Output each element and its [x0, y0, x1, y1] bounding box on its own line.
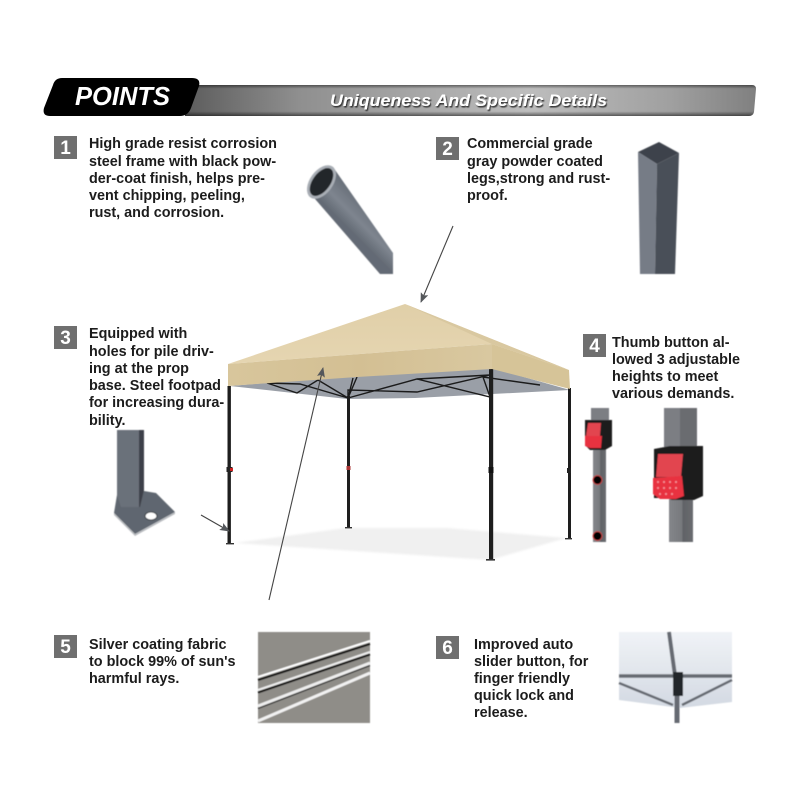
number badge 4: 4	[589, 336, 600, 357]
number badge 5	[54, 635, 77, 658]
number badge 1	[54, 136, 77, 159]
number badge 3: 3	[60, 328, 71, 349]
point 3 text: base. Steel footpad	[89, 378, 221, 394]
arrow to fabric	[269, 368, 323, 600]
header black tab	[44, 78, 199, 116]
header grey bar	[185, 85, 756, 116]
point 4 text: Thumb button al-	[612, 335, 730, 351]
canopy underside	[230, 368, 570, 399]
point 1	[54, 136, 277, 221]
point 2 text: legs,strong and rust-	[467, 171, 610, 187]
icon: small thumb button on leg	[585, 408, 612, 542]
point 3 text: ing at the prop	[89, 361, 189, 377]
point 5 text: Silver coating fabric	[89, 637, 227, 653]
number badge 6: 6	[442, 638, 453, 659]
point 5 text: to block 99% of sun's	[89, 654, 236, 670]
point 5 text: harmful rays.	[89, 671, 179, 687]
header subtitle: Uniqueness And Specific Details	[330, 91, 607, 110]
tent legs	[226, 368, 572, 561]
point 6 text: release.	[474, 705, 528, 721]
point 1 text: rust, and corrosion.	[89, 205, 224, 221]
arrow to canopy frame	[421, 226, 453, 302]
point 4	[583, 334, 740, 402]
canopy valance front	[228, 344, 492, 386]
point 3 text: holes for pile driv-	[89, 344, 214, 360]
canopy tent	[226, 304, 572, 561]
canopy valance side	[492, 344, 570, 389]
canopy roof	[228, 304, 569, 370]
icon: large thumb button on leg	[653, 408, 703, 542]
canopy truss	[267, 375, 540, 398]
icon: square steel leg	[638, 142, 679, 274]
photo: silver coating fabric	[258, 632, 370, 723]
point 2	[436, 136, 610, 204]
point 4 text: lowed 3 adjustable	[612, 352, 740, 368]
point 6 text: quick lock and	[474, 688, 574, 704]
point 3	[54, 326, 224, 429]
icon: steel footpad	[114, 430, 175, 536]
number badge 3	[54, 326, 77, 349]
point 2 text: proof.	[467, 188, 508, 204]
number badge 1: 1	[60, 138, 71, 159]
number badge 5: 5	[60, 637, 71, 658]
point 3 text: Equipped with	[89, 326, 187, 342]
point 3 text: bility.	[89, 413, 126, 429]
photo: slider button under canopy	[619, 632, 732, 723]
number badge 2: 2	[442, 139, 453, 160]
point 1 text: der-coat finish, helps pre-	[89, 171, 265, 187]
number badge 6	[436, 636, 459, 659]
point 1 text: steel frame with black pow-	[89, 154, 276, 170]
point 4 text: various demands.	[612, 386, 734, 402]
number badge 4	[583, 334, 606, 357]
number badge 2	[436, 137, 459, 160]
arrow to footpad	[201, 515, 229, 531]
point 6 text: Improved auto	[474, 637, 573, 653]
point 6 text: finger friendly	[474, 671, 570, 687]
header banner	[44, 78, 756, 116]
point 4 text: heights to meet	[612, 369, 719, 385]
point 6	[436, 636, 589, 721]
point 3 text: for increasing dura-	[89, 395, 224, 411]
point 1 text: High grade resist corrosion	[89, 136, 277, 152]
icon: oval steel tube	[301, 160, 393, 274]
point 2 text: gray powder coated	[467, 154, 603, 170]
point 5	[54, 635, 236, 687]
point 2 text: Commercial grade	[467, 136, 593, 152]
point 1 text: vent chipping, peeling,	[89, 188, 245, 204]
point 6 text: slider button, for	[474, 654, 589, 670]
header title POINTS: POINTS	[75, 81, 171, 111]
ground shadow	[235, 528, 566, 560]
